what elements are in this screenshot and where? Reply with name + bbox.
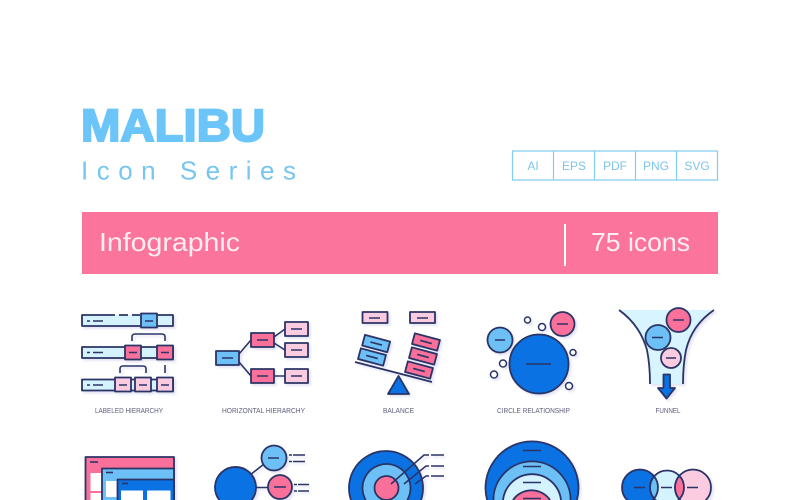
icon: funnel	[619, 308, 714, 398]
subtitle: Icon Series: Icon Series	[81, 156, 296, 186]
banner	[82, 212, 718, 274]
label: funnel: FUNNEL	[656, 408, 681, 415]
icon: circle relationship	[488, 312, 576, 394]
icon: labeled hierarchy	[82, 314, 173, 392]
file format badges: AI	[527, 159, 539, 173]
title: MALIBU: MALIBU	[81, 100, 265, 151]
icon: layered windows	[86, 457, 174, 500]
file format badges: PNG	[643, 159, 669, 173]
banner title: Infographic	[99, 227, 240, 257]
file format badges	[512, 151, 718, 180]
label: circle relationship: CIRCLE RELATIONSHIP	[497, 408, 570, 415]
file format badges: EPS	[562, 159, 586, 173]
file format badges: PDF	[603, 159, 627, 173]
banner divider	[564, 224, 566, 266]
icon count: 75 icons	[591, 227, 690, 257]
icon: horizontal hierarchy	[216, 322, 308, 383]
icon: venn diagram	[622, 470, 711, 500]
file format badges: SVG	[684, 159, 710, 173]
label: horizontal hierarchy: HORIZONTAL HIERARCHY	[222, 408, 305, 415]
icon: balance	[355, 312, 440, 394]
icon: target	[349, 451, 444, 500]
icon: nested circles	[486, 441, 579, 500]
icon: network circles	[215, 446, 309, 500]
label: balance: BALANCE	[383, 408, 414, 415]
label: labeled hierarchy: LABELED HIERARCHY	[95, 408, 163, 415]
